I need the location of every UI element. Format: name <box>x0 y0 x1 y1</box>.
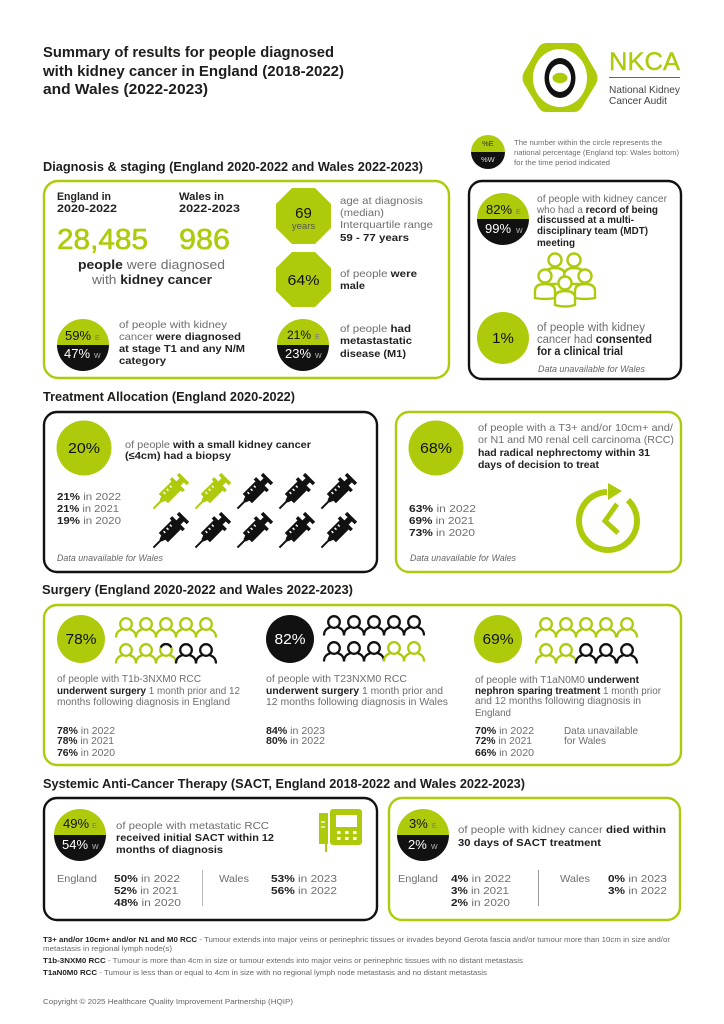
England and Wales yearly values: 3% in 2021 <box>451 885 509 897</box>
nephrectomy description: of people with a T3+ and/or 10cm+ and/ <box>478 422 673 434</box>
stat: age at diagnosis: (median) <box>340 207 384 219</box>
stat circle: 3% / 2%: W <box>431 844 438 851</box>
England and Wales yearly values: 2% in 2020 <box>451 897 510 909</box>
stat: male: 64% <box>288 272 320 289</box>
stat: stage T1 <box>57 319 245 371</box>
England and Wales yearly values: 3% in 2022 <box>608 885 667 897</box>
stat: age at diagnosis: 69 <box>295 205 312 222</box>
stat circle: 20%: 20% <box>68 440 100 457</box>
title <box>42 44 344 98</box>
stat: nephron sparing: Data unavailable <box>564 725 638 737</box>
stat: stage T1: at stage T1 and any N/M <box>119 343 245 355</box>
stat: age at diagnosis: Interquartile range <box>340 219 433 231</box>
heading: surgery: Surgery (England 2020-2022 and Wales 2022-2023) <box>42 583 353 597</box>
England and Wales yearly values: 52% in 2021 <box>114 885 178 897</box>
legend: for the time period indicated <box>514 158 610 167</box>
stat: metastatic disease: 23% <box>285 346 311 361</box>
stat: metastatic disease: disease (M1) <box>340 348 406 360</box>
big numbers: 28,485 <box>57 224 148 256</box>
stat: stage T1: of people with kidney <box>119 319 228 331</box>
stat: surgery England: 78% <box>66 631 96 648</box>
stat: age at diagnosis: age at diagnosis <box>340 195 423 207</box>
panel: biopsy <box>44 412 377 572</box>
stat circle: 49% / 54%: 54% <box>62 837 88 852</box>
big numbers: 986 <box>179 224 230 256</box>
stat: surgery Wales: 82% <box>274 631 306 648</box>
heading: diagnosis and staging: Diagnosis & staging (England 2020-2022 and Wales 2022-2023) <box>43 160 423 174</box>
copyright: Copyright © 2025 Healthcare Quality Improvement Partnership (HQIP) <box>43 997 294 1006</box>
stat: surgery Wales: 80% in 2022 <box>266 735 325 747</box>
England and Wales yearly values: 4% in 2022 <box>451 873 511 885</box>
icon: hexagon eye <box>522 43 598 112</box>
stat: nephron sparing: of people with T1aN0M0 underwent <box>475 674 639 686</box>
footnotes: T1b-3NXM0 RCC - Tumour is more than 4cm in size or tumour extends into major veins or perinephric tissues with no distant metastasis <box>43 956 523 965</box>
stat: surgery Wales <box>266 615 448 747</box>
mortality description: 30 days of SACT treatment <box>458 837 602 849</box>
stat: nephron sparing: 69% <box>482 631 514 648</box>
stat circle: 3% / 2%: 3% <box>409 816 428 831</box>
England and Wales yearly values: 53% in 2023 <box>271 873 337 885</box>
nephrectomy description: days of decision to treat <box>478 459 599 471</box>
stat: stage T1: 47% <box>64 346 90 361</box>
nephrectomy description: had radical nephrectomy within 31 <box>478 447 650 459</box>
logo: NKCA: National Kidney <box>609 84 681 96</box>
stat: nephron sparing: and 12 months following diagnosis in <box>475 695 641 707</box>
note: Data unavailable for Wales <box>57 553 163 563</box>
England and Wales yearly values: 56% in 2022 <box>271 885 337 897</box>
stat: surgery Wales: 12 months following diagnosis in Wales <box>266 696 448 708</box>
England and Wales headers: England in <box>57 191 111 203</box>
stat: male <box>276 252 417 307</box>
stat: surgery England: underwent surgery 1 month prior and 12 <box>57 685 240 697</box>
England and Wales headers <box>57 191 240 215</box>
stat circle: 49% / 54%: E <box>92 823 97 830</box>
heading: SACT: Systemic Anti-Cancer Therapy (SACT, England 2018-2022 and Wales 2022-2023) <box>43 777 525 791</box>
legend: %W <box>481 155 496 164</box>
footnotes: T1aN0M0 RCC - Tumour is less than or equal to 4cm in size with no regional lymph node metastasis and no distant metastasis <box>43 968 487 977</box>
stat: MDT: meeting <box>537 237 575 249</box>
footnotes <box>43 935 671 977</box>
legend: %E <box>482 139 494 148</box>
stat: MDT: disciplinary team (MDT) <box>537 225 648 237</box>
stat: surgery Wales: underwent surgery 1 month prior and <box>266 685 443 697</box>
stat: clinical trial <box>477 312 652 374</box>
heading: treatment allocation: Treatment Allocation (England 2020-2022) <box>43 390 295 404</box>
SACT description: received initial SACT within 12 <box>116 832 274 844</box>
stat: stage T1: 59% <box>65 328 91 343</box>
logo: NKCA: NKCA <box>609 48 680 76</box>
SACT description: of people with metastatic RCC <box>116 820 269 832</box>
people diagnosed text <box>78 257 225 287</box>
stat: stage T1: category <box>119 355 166 367</box>
stat circle: 49% / 54%: W <box>92 844 99 851</box>
yearly biopsy values: 21% in 2022 <box>57 491 121 503</box>
panel: radical nephrectomy <box>396 412 681 572</box>
stat: nephron sparing: 66% in 2020 <box>475 747 534 759</box>
stat: surgery England: 78% in 2022 <box>57 725 115 737</box>
footnotes: metastasis in regional lymph node(s) <box>43 944 173 953</box>
legend: national percentage (England top: Wales bottom) <box>514 148 679 157</box>
people icons: 69% <box>536 618 637 664</box>
England and Wales yearly values <box>398 870 667 909</box>
stat: surgery Wales: 84% in 2023 <box>266 725 325 737</box>
England and Wales yearly values: Wales <box>560 873 590 885</box>
title: with kidney cancer in England (2018-2022) <box>42 63 344 80</box>
note: Data unavailable for Wales <box>410 553 516 563</box>
stat: MDT: of people with kidney cancer <box>537 193 667 205</box>
people icons: 82% <box>324 616 424 662</box>
stat: nephron sparing: nephron sparing treatment 1 month prior <box>475 685 661 697</box>
logo: NKCA: Cancer Audit <box>609 95 667 107</box>
icon array: syringes, 2 of 10 highlighted <box>147 471 359 554</box>
stat: surgery England: of people with T1b-3NXM0 RCC <box>57 673 201 685</box>
legend: The number within the circle represents the <box>514 138 662 147</box>
England and Wales yearly values: England <box>398 873 438 885</box>
yearly biopsy values: 19% in 2020 <box>57 515 121 527</box>
England and Wales headers: 2022-2023 <box>179 203 240 215</box>
stat: MDT: who had a record of being <box>536 204 658 216</box>
stat: nephron sparing: England <box>475 707 511 719</box>
England and Wales headers: Wales in <box>179 191 224 203</box>
yearly biopsy values: 21% in 2021 <box>57 503 119 515</box>
panel: surgery <box>44 605 681 765</box>
nephrectomy description: or N1 and M0 renal cell carcinoma (RCC) <box>478 434 674 446</box>
stat: metastatic disease <box>277 319 412 371</box>
stat: clinical trial: of people with kidney <box>537 322 645 334</box>
stat: MDT: 99% <box>485 221 511 236</box>
stat circle: 49% / 54%: 49% <box>63 816 89 831</box>
stat: MDT: W <box>516 228 523 235</box>
mortality description <box>458 824 666 849</box>
stat: nephron sparing: for Wales <box>564 735 606 747</box>
stat: age at diagnosis <box>276 188 433 244</box>
legend <box>471 135 679 169</box>
icon: group of people <box>535 254 595 306</box>
yearly nephrectomy values: 69% in 2021 <box>409 515 474 527</box>
stat: MDT: 82% <box>486 202 512 217</box>
panel: MDT and clinical trial <box>469 181 681 379</box>
England and Wales yearly values: 0% in 2023 <box>608 873 667 885</box>
stat: surgery Wales: of people with T23NXM0 RCC <box>266 673 407 685</box>
stat circle: 49% / 54% <box>54 809 106 861</box>
stat: metastatic disease: E <box>315 334 320 341</box>
stat: metastatic disease: W <box>315 353 322 360</box>
England and Wales headers: 2020-2022 <box>57 203 117 215</box>
stat: surgery England: 78% in 2021 <box>57 735 114 747</box>
mortality description: of people with kidney cancer died within <box>458 824 666 836</box>
biopsy description <box>125 439 311 462</box>
stat circle: 68% <box>408 420 464 476</box>
stat: clinical trial: cancer had consented <box>537 334 652 346</box>
stat: surgery England <box>57 615 240 759</box>
yearly biopsy values <box>57 491 121 527</box>
SACT description: months of diagnosis <box>116 844 223 856</box>
people diagnosed text: people were diagnosed <box>78 257 225 272</box>
big numbers <box>57 224 230 256</box>
yearly nephrectomy values: 73% in 2020 <box>409 527 475 539</box>
stat: nephron sparing: 70% in 2022 <box>475 725 534 737</box>
stat: nephron sparing: 72% in 2021 <box>475 735 532 747</box>
people icons: 78% <box>116 618 216 664</box>
icon: infusion pump <box>319 809 362 852</box>
icon: clock with arrow <box>579 483 637 550</box>
panel: diagnosis and staging <box>44 181 449 378</box>
England and Wales yearly values: 50% in 2022 <box>114 873 180 885</box>
England and Wales yearly values: Wales <box>219 873 249 885</box>
panel: initial SACT <box>44 798 377 920</box>
stat: clinical trial: Data unavailable for Wales <box>538 364 645 374</box>
SACT description <box>116 820 274 856</box>
England and Wales yearly values: 48% in 2020 <box>114 897 181 909</box>
biopsy description: of people with a small kidney cancer <box>125 439 311 451</box>
stat: male: of people were <box>340 268 417 280</box>
stat circle: 3% / 2%: 2% <box>408 837 427 852</box>
stat: surgery England: months following diagnosis in England <box>57 696 230 708</box>
stat: metastatic disease: metastastatic <box>340 335 412 347</box>
stat: male: male <box>340 280 365 292</box>
stat circle: 68%: 68% <box>420 440 452 457</box>
England and Wales yearly values: England <box>57 873 97 885</box>
stat: clinical trial: 1% <box>492 330 514 347</box>
title: and Wales (2022-2023) <box>43 81 208 98</box>
title: Summary of results for people diagnosed <box>43 44 334 61</box>
stat: nephron sparing <box>474 615 661 759</box>
stat: stage T1: E <box>95 335 100 342</box>
England and Wales yearly values <box>57 870 337 909</box>
stat circle: 3% / 2% <box>397 809 449 861</box>
nephrectomy description <box>478 422 674 471</box>
stat: age at diagnosis: 59 - 77 years <box>340 232 409 244</box>
panel: died within 30 days of SACT <box>389 798 680 920</box>
stat: clinical trial: for a clinical trial <box>537 346 623 358</box>
stat: metastatic disease: of people had <box>340 323 411 335</box>
people diagnosed text: with kidney cancer <box>91 272 212 287</box>
stat: metastatic disease: 21% <box>287 328 311 342</box>
logo: NKCA <box>522 43 681 112</box>
stat: stage T1: cancer were diagnosed <box>119 331 241 343</box>
stat circle: 20% <box>56 420 112 476</box>
stat: MDT <box>477 193 667 249</box>
stat: age at diagnosis: years <box>292 221 315 232</box>
stat: MDT: E <box>516 209 521 216</box>
stat: surgery England: 76% in 2020 <box>57 747 115 759</box>
stat: MDT: discussed at a multi- <box>537 214 634 226</box>
biopsy description: (≤4cm) had a biopsy <box>125 450 231 462</box>
stat circle: 3% / 2%: E <box>432 823 437 830</box>
yearly nephrectomy values: 63% in 2022 <box>409 503 476 515</box>
stat: stage T1: W <box>94 353 101 360</box>
yearly nephrectomy values <box>409 503 476 539</box>
footnotes: T3+ and/or 10cm+ and/or N1 and M0 RCC - Tumour extends into major veins or perinephric tissues or invades beyond Gerota fascia and/or tumour more than 10cm in size and/or <box>43 935 671 944</box>
